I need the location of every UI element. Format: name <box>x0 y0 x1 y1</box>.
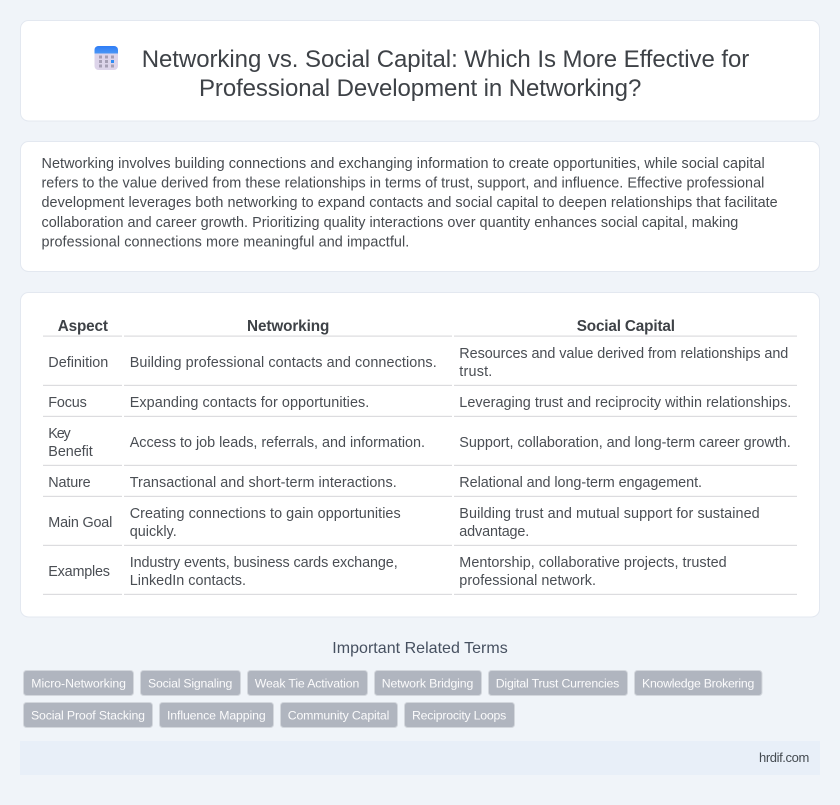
row: main goal <box>43 506 797 546</box>
row: key benefit: Access to job leads, referrals, and information. <box>130 435 425 451</box>
title: Networking vs. Social Capital: Which Is More Effective for <box>142 46 749 73</box>
chip: Digital Trust Currencies: Digital Trust Currencies <box>496 676 619 690</box>
intro paragraph: collaboration and career growth. Prioritizing quality interactions over quantity enhances social capital, making <box>42 215 738 231</box>
row: key benefit: Benefit <box>48 444 93 460</box>
row: examples: Industry events, business cards exchange, <box>130 555 398 571</box>
row: definition: Building professional contacts and connections. <box>130 355 437 371</box>
chip: Social Signaling <box>140 670 240 696</box>
chip: Knowledge Brokering: Knowledge Brokering <box>642 676 754 690</box>
row: key benefit <box>43 426 797 466</box>
row: definition: Definition <box>48 355 108 371</box>
row: focus: Focus <box>48 395 87 411</box>
chip: Reciprocity Loops <box>404 702 514 728</box>
table header row: Social Capital <box>577 318 675 335</box>
row: nature: Relational and long-term engagement. <box>459 475 702 491</box>
intro paragraph <box>42 156 778 250</box>
title <box>142 46 749 102</box>
row: nature <box>43 475 797 497</box>
related term chips <box>24 670 762 728</box>
chip: Weak Tie Activation: Weak Tie Activation <box>255 676 359 690</box>
row: focus: Expanding contacts for opportunities. <box>130 395 369 411</box>
table header row: Aspect <box>58 318 108 335</box>
panel: introduction text <box>20 142 820 272</box>
chip: Knowledge Brokering <box>634 670 762 696</box>
row: main goal: quickly. <box>130 524 177 540</box>
row: examples: professional network. <box>459 573 596 589</box>
intro paragraph: development leverages both networking to expand contacts and social capital to deepen relationships that facilitate <box>42 195 778 211</box>
table header row: Networking <box>247 318 329 335</box>
panel: comparison table <box>20 292 820 617</box>
row: key benefit: Support, collaboration, and long-term career growth. <box>459 435 791 451</box>
intro paragraph: Networking involves building connections and exchanging information to create opportunities, while social capital <box>42 156 765 172</box>
footer source label: hrdif.com <box>759 750 809 765</box>
intro paragraph: refers to the value derived from these relationships in terms of trust, support, and influence. Effective professional <box>42 176 764 192</box>
chip: Network Bridging <box>374 670 482 696</box>
row: definition: trust. <box>459 364 492 380</box>
row: nature: Nature <box>48 475 91 491</box>
chip: Network Bridging: Network Bridging <box>382 676 473 690</box>
row: nature: Transactional and short-term interactions. <box>130 475 397 491</box>
row: examples: Mentorship, collaborative projects, trusted <box>459 555 727 571</box>
row: definition <box>43 346 797 386</box>
row: focus: Leveraging trust and reciprocity within relationships. <box>459 395 791 411</box>
row: examples: LinkedIn contacts. <box>130 573 246 589</box>
chip: Community Capital <box>280 702 398 728</box>
chip: Digital Trust Currencies <box>488 670 628 696</box>
row: main goal: advantage. <box>459 524 529 540</box>
chip: Social Proof Stacking: Social Proof Stacking <box>31 708 145 722</box>
row: examples: Examples <box>48 564 110 580</box>
footer band <box>20 741 820 775</box>
chip: Social Proof Stacking <box>24 702 152 728</box>
chip: Reciprocity Loops: Reciprocity Loops <box>412 708 506 722</box>
table header row <box>43 318 797 337</box>
row: main goal: Main Goal <box>48 515 112 531</box>
row: focus <box>43 395 797 417</box>
row: main goal: Creating connections to gain opportunities <box>130 506 401 522</box>
chip: Influence Mapping: Influence Mapping <box>167 708 266 722</box>
row: main goal: Building trust and mutual support for sustained <box>459 506 760 522</box>
intro paragraph: professional connections more meaningful and impactful. <box>42 234 409 250</box>
title: Professional Development in Networking? <box>199 75 641 102</box>
section heading: related terms: Important Related Terms <box>332 640 508 657</box>
icon: calendar <box>94 46 118 70</box>
row: definition: Resources and value derived from relationships and <box>459 346 788 362</box>
chip: Influence Mapping <box>160 702 274 728</box>
chip: Social Signaling: Social Signaling <box>148 676 232 690</box>
row: examples <box>43 555 797 595</box>
chip: Micro-Networking <box>24 670 134 696</box>
chip: Micro-Networking: Micro-Networking <box>31 676 126 690</box>
chip: Weak Tie Activation <box>248 670 368 696</box>
row: key benefit: Key <box>48 426 71 442</box>
panel: title header <box>20 20 820 121</box>
chip: Community Capital: Community Capital <box>288 708 389 722</box>
